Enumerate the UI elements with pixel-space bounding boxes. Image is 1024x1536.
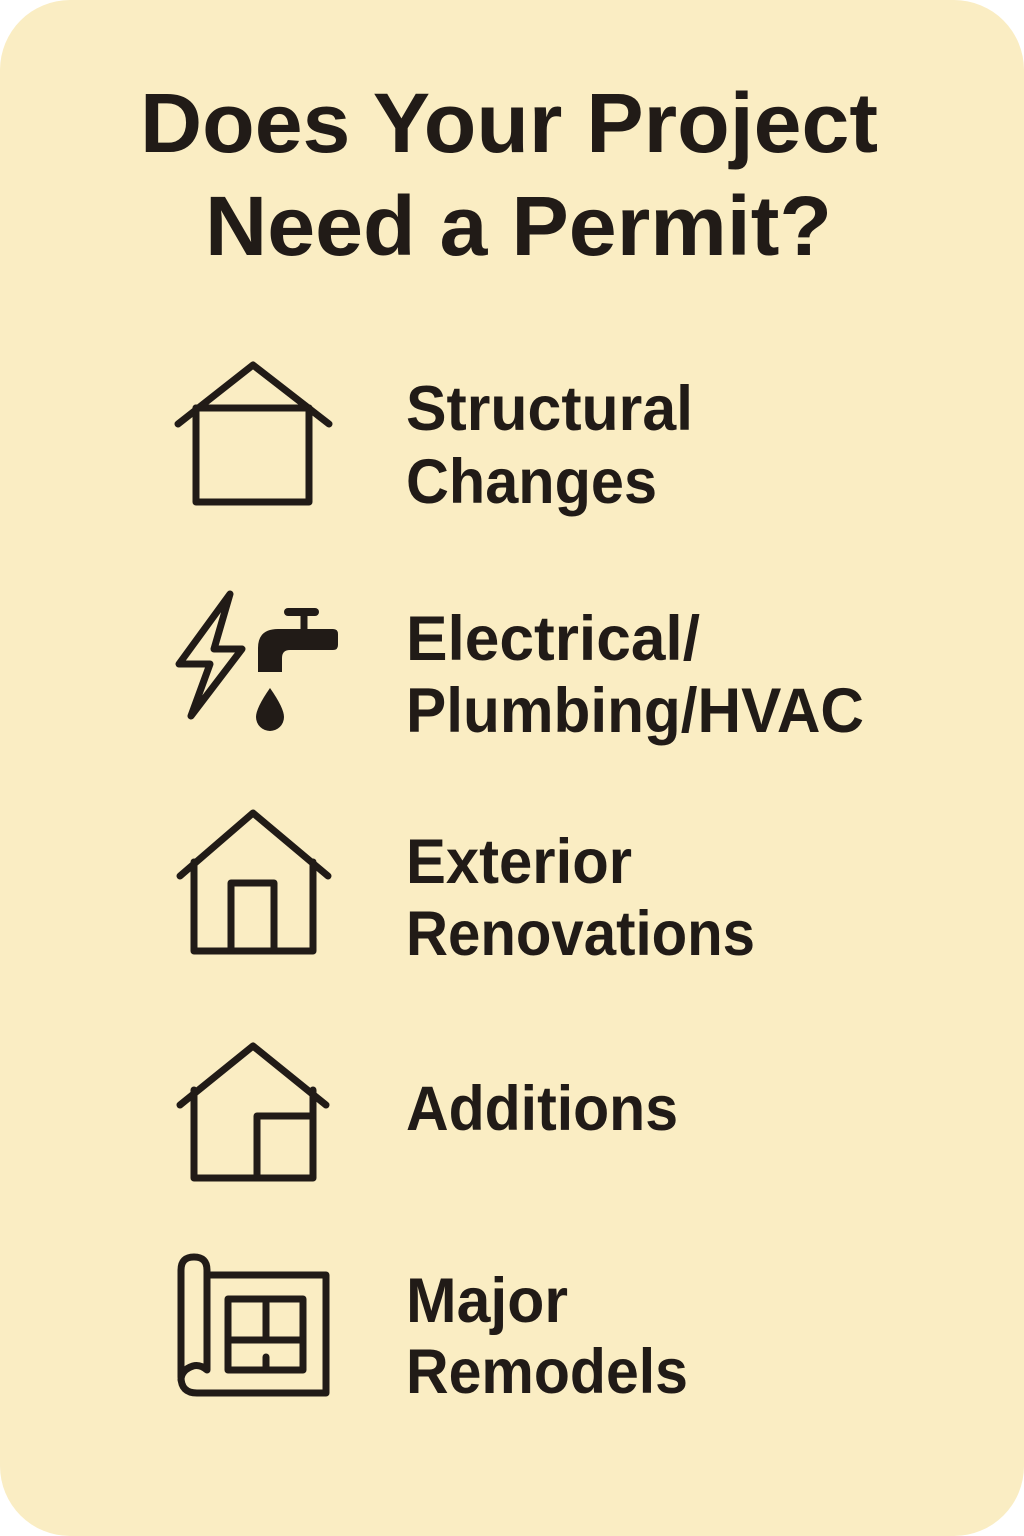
title xyxy=(140,76,878,273)
title: Does Your Project xyxy=(140,76,878,170)
label: electrical plumbing hvac: Plumbing/HVAC xyxy=(406,676,864,746)
label: major remodels xyxy=(406,1266,688,1407)
item: structural changes xyxy=(178,365,693,517)
icon: bolt and faucet xyxy=(179,594,338,731)
title: Need a Permit? xyxy=(205,179,832,273)
label: structural changes: Structural xyxy=(406,374,693,444)
item: major remodels xyxy=(181,1257,688,1407)
label: major remodels: Major xyxy=(406,1266,568,1336)
item: exterior renovations xyxy=(180,813,755,969)
label: structural changes xyxy=(406,374,693,517)
item: additions xyxy=(180,1046,678,1178)
label: major remodels: Remodels xyxy=(406,1337,688,1407)
icon: house outline xyxy=(178,365,329,502)
label: electrical plumbing hvac: Electrical/ xyxy=(406,604,700,674)
label: exterior renovations xyxy=(406,827,755,969)
label: exterior renovations: Renovations xyxy=(406,899,755,969)
icon: house with addition xyxy=(180,1046,326,1178)
icon: house with door xyxy=(180,813,328,951)
label: structural changes: Changes xyxy=(406,447,657,517)
label: exterior renovations: Exterior xyxy=(406,827,632,897)
label: additions: Additions xyxy=(406,1074,678,1144)
item: electrical plumbing hvac xyxy=(179,594,864,746)
icon: blueprint xyxy=(181,1257,326,1393)
label: electrical plumbing hvac xyxy=(406,604,864,746)
